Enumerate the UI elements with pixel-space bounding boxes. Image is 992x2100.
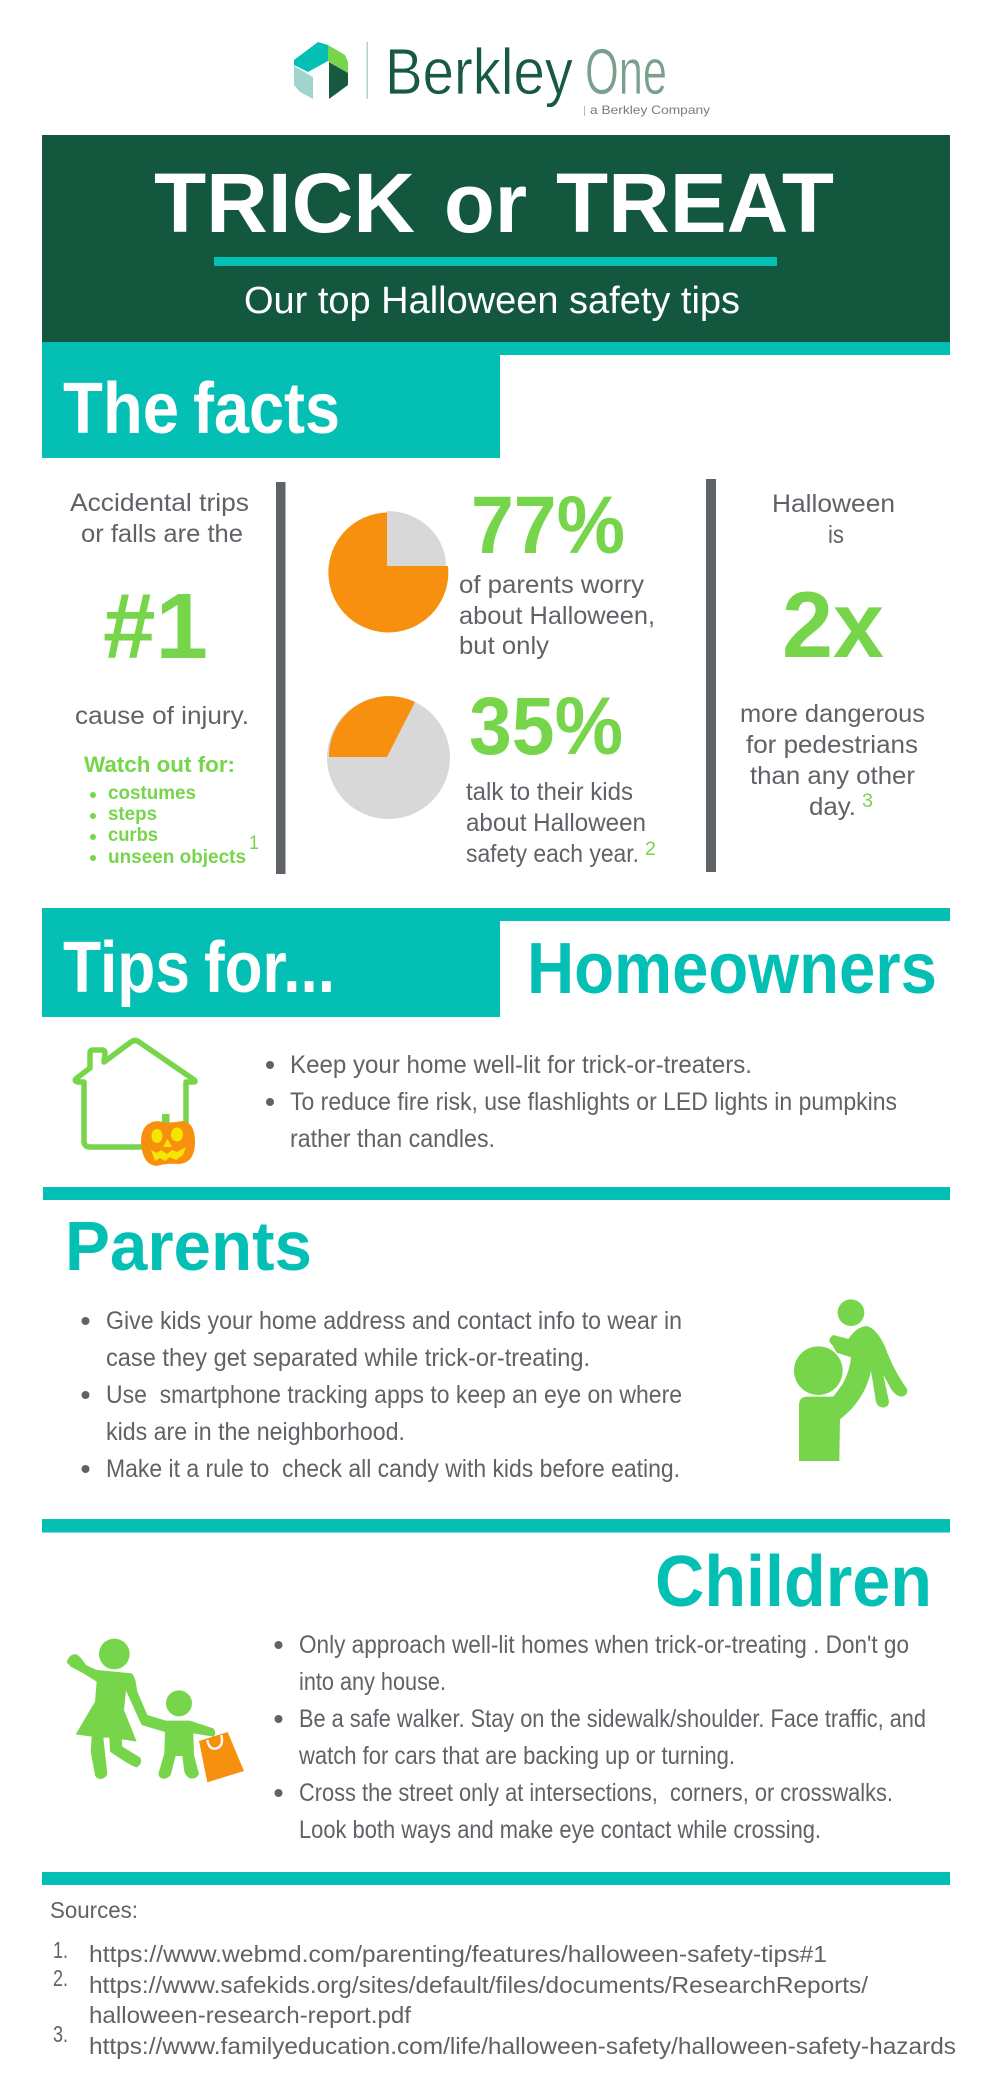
logo: Berkley One: One [585, 35, 667, 108]
list: watch out for: unseen objects [108, 847, 246, 868]
icon: logo hexagon [294, 42, 348, 99]
heading: Tips for Homeowners: Tips [63, 928, 190, 1008]
panel: number one cause of injury: or falls are the [81, 520, 243, 548]
logo: Berkley One: a Berkley Company [590, 103, 710, 117]
stat: 35%: 35% [469, 681, 623, 772]
list: watch out for [84, 752, 259, 868]
panel: number one cause of injury: Accidental trips [70, 489, 249, 517]
panel: pedestrian danger: than any other [750, 762, 915, 790]
sources [50, 1897, 956, 2059]
panel: parent statistics: about Halloween [466, 809, 646, 837]
heading: Parents: Parents [65, 1207, 312, 1285]
sources: Sources: [50, 1897, 138, 1923]
sources: halloween-research-report.pdf [89, 2002, 412, 2028]
heading: Children: Children [655, 1542, 932, 1622]
list: children tips: Cross the street only at intersections, corners, or crosswalks. [299, 1779, 893, 1807]
list: parent tips [82, 1307, 682, 1483]
title: TREAT [556, 156, 834, 250]
logo: Berkley One: Berkley [385, 35, 573, 108]
panel: pedestrian danger: more dangerous [740, 700, 925, 728]
panel: pedestrian danger: for pedestrians [746, 731, 918, 759]
panel: pedestrian danger: is [828, 521, 844, 549]
stat: 2x: 2x [782, 572, 884, 677]
list: homeowner tips [266, 1051, 897, 1153]
panel: parent statistics: about Halloween, [459, 602, 655, 630]
list: children tips: into any house. [299, 1668, 446, 1696]
pie chart: 77 percent [328, 511, 448, 632]
panel: pedestrian danger: 3 [862, 791, 873, 812]
list: parent tips: kids are in the neighborhood. [106, 1418, 405, 1446]
title: TRICK [154, 156, 415, 250]
panel: parent statistics: of parents worry [459, 571, 645, 599]
list: parent tips: case they get separated while trick-or-treating. [106, 1344, 590, 1372]
stat: 77%: 77% [471, 480, 625, 571]
icon: house with pumpkin [75, 1040, 195, 1166]
logo: Berkley One [294, 35, 710, 117]
list: children tips [274, 1631, 926, 1844]
panel: pedestrian danger: Halloween [772, 490, 895, 518]
panel: pedestrian danger: day. [809, 793, 856, 821]
list: homeowner tips: To reduce fire risk, use flashlights or LED lights in pumpkins [290, 1088, 897, 1116]
list: homeowner tips: rather than candles. [290, 1125, 495, 1153]
icon: adult and child with candy bag [67, 1639, 244, 1782]
list: children tips: Only approach well-lit homes when trick-or-treating . Don't go [299, 1631, 909, 1659]
sources: 3. [53, 2021, 68, 2047]
heading: The facts: The [63, 369, 179, 449]
panel: parent statistics: safety each year. [466, 840, 639, 868]
stat: #1: #1 [103, 574, 208, 678]
list: watch out for: costumes [108, 783, 196, 804]
list: watch out for: steps [108, 804, 157, 825]
panel: parent statistics: but only [459, 632, 550, 660]
sources: https://www.webmd.com/parenting/features/halloween-safety-tips#1 [89, 1941, 827, 1967]
sources: 1. [53, 1937, 68, 1963]
sources: https://www.safekids.org/sites/default/files/documents/ResearchReports/ [89, 1972, 869, 1998]
heading: The facts: facts [193, 369, 340, 449]
panel: number one cause of injury [70, 489, 259, 868]
subtitle: Our top Halloween safety tips [244, 280, 740, 322]
list: children tips: watch for cars that are backing up or turning. [298, 1742, 735, 1770]
list: parent tips: Use smartphone tracking apps to keep an eye on where [106, 1381, 682, 1409]
heading: Tips for Homeowners: for... [204, 928, 335, 1008]
list: children tips: Look both ways and make eye contact while crossing. [299, 1816, 821, 1844]
title [154, 156, 834, 250]
list: watch out for: Watch out for: [84, 752, 235, 777]
pie chart: 35 percent [327, 696, 450, 819]
list: homeowner tips: Keep your home well-lit for trick-or-treaters. [290, 1051, 752, 1079]
list: parent tips: Give kids your home address and contact info to wear in [106, 1307, 682, 1335]
panel: pedestrian danger [740, 490, 925, 821]
panel: parent statistics [327, 480, 656, 868]
title banner [42, 135, 950, 342]
sources: 2. [53, 1965, 68, 1991]
heading: The facts [42, 342, 950, 458]
title: or [444, 156, 527, 250]
icon: parent lifting child [794, 1299, 907, 1461]
list: watch out for: 1 [249, 833, 259, 854]
panel: number one cause of injury: cause of injury. [75, 702, 249, 730]
panel: parent statistics: 2 [645, 839, 656, 860]
sources: https://www.familyeducation.com/life/halloween-safety/halloween-safety-hazards [89, 2033, 956, 2059]
heading: Tips for Homeowners [42, 908, 950, 1017]
list: parent tips: Make it a rule to check all candy with kids before eating. [106, 1455, 680, 1483]
heading: Tips for Homeowners: Homeowners [527, 929, 937, 1009]
panel: parent statistics: talk to their kids [466, 778, 633, 806]
list: watch out for: curbs [108, 825, 158, 846]
